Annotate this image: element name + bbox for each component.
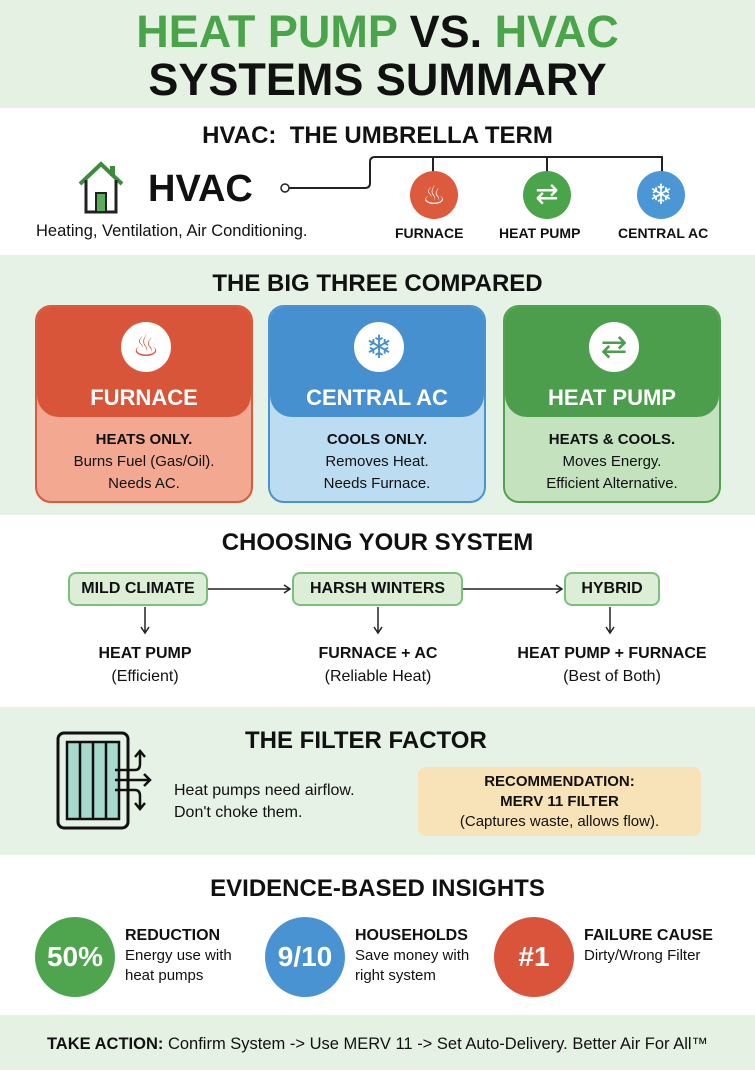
heading big three: THE BIG THREE COMPARED	[212, 270, 543, 297]
icon: central ac	[637, 171, 685, 219]
icon: heat pump: ⇄	[535, 178, 559, 209]
icon: filter	[56, 732, 152, 830]
callout: recommendation: (Captures waste, allows flow).	[460, 813, 659, 830]
card: furnace: Needs AC.	[108, 475, 180, 492]
card: central ac: Needs Furnace.	[324, 475, 430, 492]
section: umbrella term: CENTRAL AC	[618, 225, 708, 241]
card: furnace	[35, 305, 253, 503]
stat text 3: FAILURE CAUSE	[584, 927, 713, 944]
title	[136, 6, 619, 105]
stat: 9/10	[265, 917, 345, 997]
stat text 1: heat pumps	[125, 967, 203, 984]
card: central ac	[268, 305, 486, 503]
card: heat pump: Moves Energy.	[563, 453, 661, 470]
card: furnace: Burns Fuel (Gas/Oil).	[74, 453, 214, 470]
card: central ac: ❄	[366, 329, 392, 365]
card: furnace: FURNACE	[90, 385, 198, 410]
card: central ac: CENTRAL AC	[306, 385, 448, 410]
title: SYSTEMS SUMMARY	[148, 54, 607, 105]
section: umbrella term	[36, 122, 708, 241]
card: heat pump: Efficient Alternative.	[546, 475, 678, 492]
card: central ac: Removes Heat.	[325, 453, 429, 470]
card: furnace: HEATS ONLY.	[96, 431, 192, 448]
stat: #1	[494, 917, 574, 997]
filter text	[174, 782, 355, 821]
stat text 2: HOUSEHOLDS	[355, 927, 468, 944]
heading filter: THE FILTER FACTOR	[245, 727, 487, 754]
icon: furnace: ♨	[422, 180, 446, 210]
callout: recommendation: RECOMMENDATION:	[484, 773, 635, 790]
icon: house	[78, 161, 124, 214]
result 2: (Reliable Heat)	[325, 668, 431, 685]
HVAC label: HVAC	[148, 168, 253, 210]
result 3: (Best of Both)	[563, 668, 661, 685]
result 3: HEAT PUMP + FURNACE	[517, 645, 707, 662]
heading insights: EVIDENCE-BASED INSIGHTS	[210, 875, 545, 902]
card: heat pump: ⇄	[601, 328, 627, 364]
callout: recommendation: MERV 11 FILTER	[500, 793, 619, 810]
heading choosing: CHOOSING YOUR SYSTEM	[222, 529, 533, 556]
title band	[0, 0, 755, 108]
footer: take action: TAKE ACTION: Confirm System -> Use MERV 11 -> Set Auto-Delivery. Better Air For All™	[47, 1035, 708, 1053]
footer: take action	[0, 1015, 755, 1070]
section: umbrella term: HEAT PUMP	[499, 225, 580, 241]
labels	[395, 225, 708, 241]
stat text 2: Save money with	[355, 947, 469, 964]
card: heat pump	[503, 305, 721, 503]
box harsh	[292, 572, 463, 606]
box harsh: HARSH WINTERS	[310, 580, 445, 597]
result 3	[517, 645, 707, 685]
card: heat pump: HEATS & COOLS.	[549, 431, 675, 448]
result 1: (Efficient)	[111, 668, 179, 685]
filter text: Heat pumps need airflow.	[174, 782, 355, 799]
card: central ac: COOLS ONLY.	[327, 431, 427, 448]
stat: 50%	[35, 917, 115, 997]
stat text 1: REDUCTION	[125, 927, 220, 944]
icon: furnace	[410, 171, 458, 219]
result 1	[98, 645, 192, 685]
stat: #1: #1	[518, 941, 550, 972]
box mild	[68, 572, 208, 606]
box mild: MILD CLIMATE	[81, 580, 195, 597]
stat text 1	[125, 927, 232, 984]
section: big three	[0, 255, 755, 515]
stat: 50%: 50%	[47, 941, 103, 972]
icon: central ac: ❄	[649, 179, 673, 210]
box hybrid	[564, 572, 660, 606]
stat text 2	[355, 927, 469, 984]
title: HEAT PUMP VS. HVAC	[136, 6, 619, 57]
connector lines	[280, 156, 663, 193]
stat text 3	[584, 927, 713, 964]
stat text 2: right system	[355, 967, 436, 984]
subtitle: Heating, Ventilation, Air Conditioning.	[36, 222, 308, 240]
result 2: FURNACE + AC	[319, 645, 437, 662]
box hybrid: HYBRID	[581, 580, 643, 597]
result 2	[319, 645, 437, 685]
stat: 9/10: 9/10	[278, 941, 332, 972]
icon: heat pump	[523, 171, 571, 219]
card: heat pump: HEAT PUMP	[548, 385, 676, 410]
section: filter	[0, 707, 755, 855]
stat text 1: Energy use with	[125, 947, 232, 964]
section: umbrella term: FURNACE	[395, 225, 463, 241]
result 1: HEAT PUMP	[98, 645, 192, 662]
stat text 3: Dirty/Wrong Filter	[584, 947, 700, 964]
card: furnace: ♨	[133, 330, 159, 363]
callout: recommendation	[418, 767, 701, 836]
heading umbrella: HVAC: THE UMBRELLA TERM	[202, 122, 553, 149]
filter text: Don't choke them.	[174, 804, 302, 821]
flow chart	[140, 584, 615, 634]
